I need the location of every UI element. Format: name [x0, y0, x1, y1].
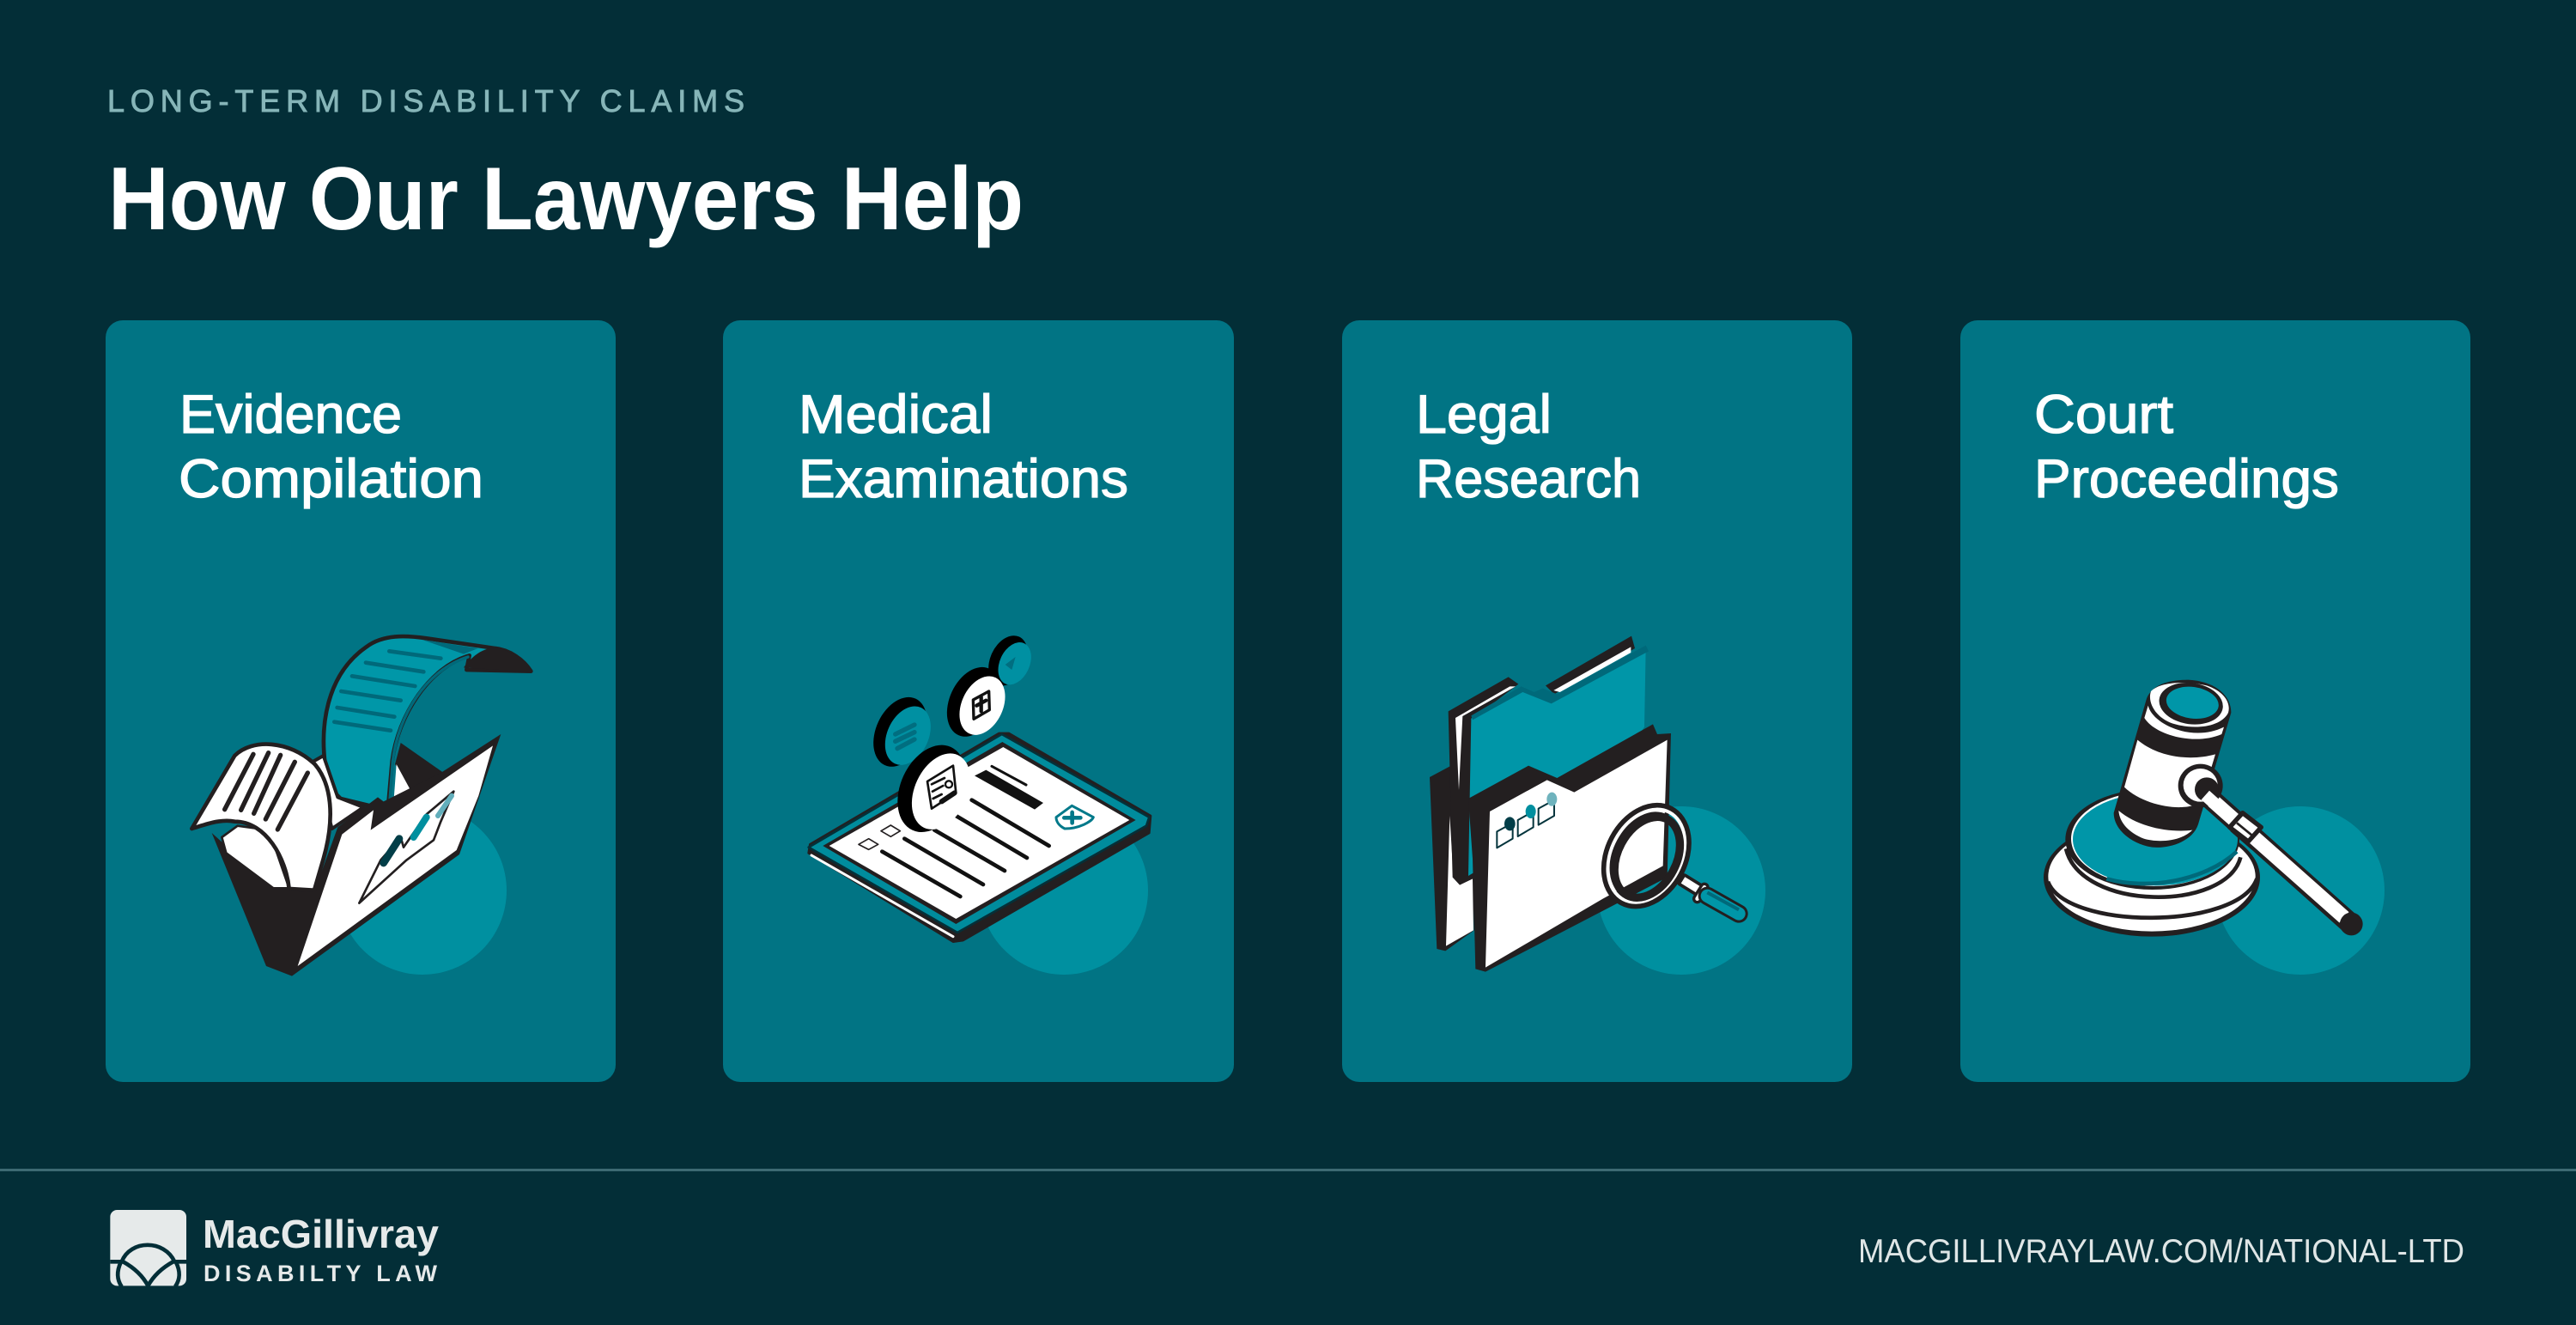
accent circle	[338, 806, 507, 975]
floating icon: main report coin	[884, 734, 982, 843]
heading: evidence compilation: Compilation	[179, 449, 483, 509]
heading: court proceedings	[2034, 385, 2339, 509]
accent circle	[2216, 806, 2385, 975]
gavel head	[2114, 678, 2231, 848]
heading: legal research	[1416, 385, 1641, 509]
heading: court proceedings: Proceedings	[2034, 449, 2339, 509]
footer url: MACGILLIVRAYLAW.COM/NATIONAL-LTD	[1858, 1233, 2464, 1270]
icon: folders with magnifying glass	[1430, 636, 1739, 972]
heading: legal research: Research	[1416, 449, 1641, 509]
logo mark	[110, 1210, 186, 1286]
heading: evidence compilation: Evidence	[179, 385, 402, 445]
card background	[1960, 320, 2470, 1082]
panel: legal research	[1342, 320, 1852, 1082]
heading: legal research: Legal	[1416, 385, 1552, 445]
card background	[723, 320, 1234, 1082]
floating icon: small heart coin	[981, 629, 1037, 692]
icon: folder with curling documents	[191, 636, 531, 976]
accent circle	[1597, 806, 1765, 975]
heading: medical examinations	[799, 385, 1128, 509]
logo subline: DISABILTY LAW	[204, 1261, 438, 1286]
magnifying glass	[1587, 791, 1739, 921]
heading: medical examinations: Examinations	[799, 449, 1128, 509]
panel: court proceedings	[1960, 320, 2470, 1082]
gavel handle	[2204, 793, 2363, 935]
eyebrow heading: LONG-TERM DISABILITY CLAIMS	[107, 83, 744, 119]
icon: tablet with floating medical icons	[809, 629, 1151, 942]
accent circle	[980, 806, 1148, 975]
logo: macgillivray disability law	[110, 1210, 439, 1286]
floating icon: teal stack coin	[863, 689, 939, 775]
heading: court proceedings: Court	[2034, 385, 2174, 445]
card background	[106, 320, 616, 1082]
gavel collar	[2178, 764, 2228, 816]
logo wordmark: MacGillivray	[203, 1212, 439, 1256]
panel: medical examinations	[723, 320, 1234, 1082]
heading: medical examinations: Medical	[799, 385, 993, 445]
title: How Our Lawyers Help	[108, 149, 1024, 249]
floating icon: white cross coin	[937, 659, 1014, 745]
footer divider	[0, 1169, 2576, 1171]
panel: evidence compilation	[106, 320, 616, 1082]
icon: gavel on sound block	[2044, 678, 2363, 937]
card background	[1342, 320, 1852, 1082]
heading: evidence compilation	[179, 385, 483, 509]
